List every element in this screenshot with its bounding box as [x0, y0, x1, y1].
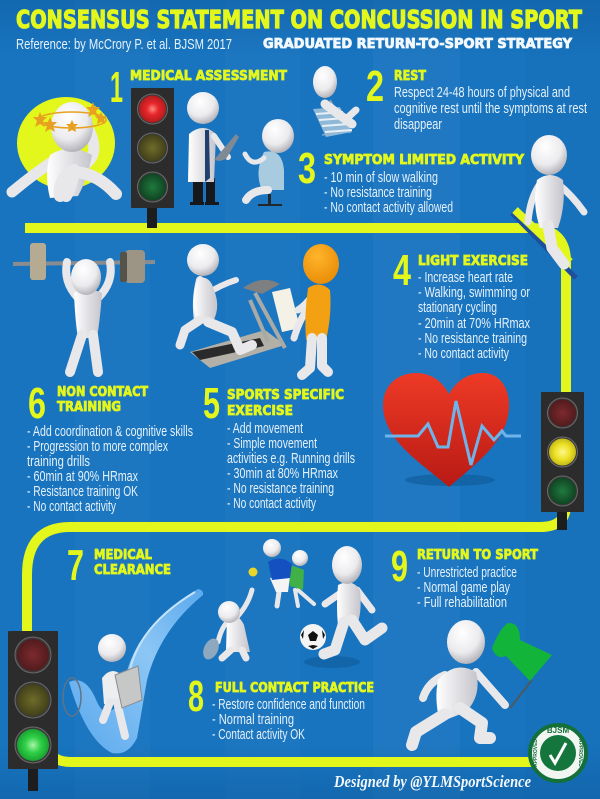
- step 4 number: 4: [393, 246, 411, 295]
- step 8 text: - Normal training: [212, 711, 294, 728]
- step 1 heading: MEDICAL ASSESSMENT: [130, 69, 287, 84]
- traffic light: green: [8, 631, 58, 791]
- traffic light: yellow: [541, 392, 584, 530]
- illustration: heart with ECG trace: [383, 373, 521, 487]
- step 9 text: - Normal game play: [417, 579, 510, 596]
- illustration: weightlifter: [13, 243, 155, 372]
- step 4 text: - 20min at 70% HRmax: [418, 315, 530, 332]
- step 6 text: - Add coordination & cognitive skills: [27, 423, 193, 440]
- step 6 text: training drills: [27, 453, 90, 470]
- illustration: treadmill with runner and orange trainer: [180, 244, 339, 375]
- step 5 text: [227, 388, 355, 512]
- step 4 text: - Walking, swimming or: [418, 284, 530, 301]
- step 1 number: 1: [110, 63, 123, 112]
- step 3 number: 3: [298, 144, 316, 193]
- step 6 text: - Progression to more complex: [27, 438, 168, 455]
- step 6 text: NON CONTACT: [57, 385, 148, 400]
- step 3 text: - 10 min of slow walking: [324, 169, 438, 186]
- step 5 text: - Add movement: [227, 420, 304, 437]
- footer credit: Designed by @YLMSportScience: [333, 772, 531, 791]
- step 3 text: - No contact activity allowed: [324, 199, 453, 216]
- step 4 text: - Increase heart rate: [418, 269, 513, 286]
- badge: BJSM approved: APPROVED: [577, 739, 583, 767]
- step 4 text: stationary cycling: [418, 299, 497, 316]
- step 2 text: [394, 69, 588, 133]
- illustration: patient: [245, 119, 294, 206]
- step 9 text: RETURN TO SPORT: [417, 548, 538, 563]
- illustration: figure with green flag: [412, 620, 552, 745]
- step 2 text: disappear: [394, 116, 442, 133]
- step 4 text: - No contact activity: [418, 345, 509, 362]
- yellow pathway line: [25, 228, 566, 762]
- step 2 number: 2: [366, 62, 384, 111]
- step 4 text: [418, 254, 530, 362]
- step 8 text: [212, 681, 374, 743]
- illustration: concussed figure with stars: [12, 97, 116, 198]
- traffic light: red: [131, 88, 174, 228]
- step 5 number: 5: [203, 379, 220, 428]
- step 3 text: [324, 153, 525, 216]
- step 5 text: EXERCISE: [227, 404, 293, 419]
- step 4 text: - No resistance training: [418, 330, 527, 347]
- step 8 number: 8: [188, 672, 204, 721]
- step 6 text: - 60min at 90% HRmax: [27, 468, 138, 485]
- step 3 text: - No resistance training: [324, 184, 432, 201]
- illustration: resting figure in deck chair: [313, 66, 356, 137]
- step 5 text: activities e.g. Running drills: [227, 450, 355, 467]
- step 9 text: - Unrestricted practice: [417, 564, 517, 581]
- step 6 text: [27, 385, 193, 515]
- step 4 text: LIGHT EXERCISE: [418, 254, 528, 269]
- step 6 text: - No contact activity: [27, 498, 116, 515]
- step 6 text: - Resistance training OK: [27, 483, 138, 500]
- step 8 text: - Contact activity OK: [212, 726, 305, 743]
- badge: BJSM approved: [530, 725, 586, 781]
- step 5 text: - No resistance training: [227, 480, 334, 497]
- step 9 text: [417, 548, 538, 611]
- step 8 text: FULL CONTACT PRACTICE: [215, 681, 374, 696]
- illustration: doctor: [187, 92, 239, 205]
- step 7 heading: MEDICAL: [94, 548, 152, 563]
- step 9 text: - Full rehabilitation: [417, 594, 507, 611]
- step 9 number: 9: [391, 542, 408, 591]
- step 5 text: - 30min at 80% HRmax: [227, 465, 338, 482]
- illustration: contact players and tennis and soccer figures: [200, 539, 382, 668]
- reference line: Reference: by McCrory P. et al. BJSM 2017: [16, 36, 232, 53]
- step 6 text: TRAINING: [57, 400, 121, 415]
- step 7 heading: [94, 548, 171, 578]
- badge: BJSM approved: BJSM: [547, 726, 569, 735]
- illustration: big check mark with medic: [63, 589, 203, 753]
- step 8 text: - Restore confidence and function: [212, 696, 365, 713]
- step 5 text: SPORTS SPECIFIC: [227, 388, 344, 403]
- badge: BJSM approved: APPROVED: [533, 739, 539, 767]
- step 5 text: - No contact activity: [227, 495, 316, 512]
- step 3 text: SYMPTOM LIMITED ACTIVITY: [324, 153, 525, 168]
- step 7 number: 7: [67, 541, 84, 590]
- subtitle: GRADUATED RETURN-TO-SPORT STRATEGY: [263, 37, 573, 52]
- step 5 text: - Simple movement: [227, 435, 318, 452]
- step 2 text: REST: [394, 69, 426, 84]
- step 6 number: 6: [28, 379, 46, 428]
- illustration: walker on path: [512, 135, 584, 278]
- step 7 heading: CLEARANCE: [94, 563, 171, 578]
